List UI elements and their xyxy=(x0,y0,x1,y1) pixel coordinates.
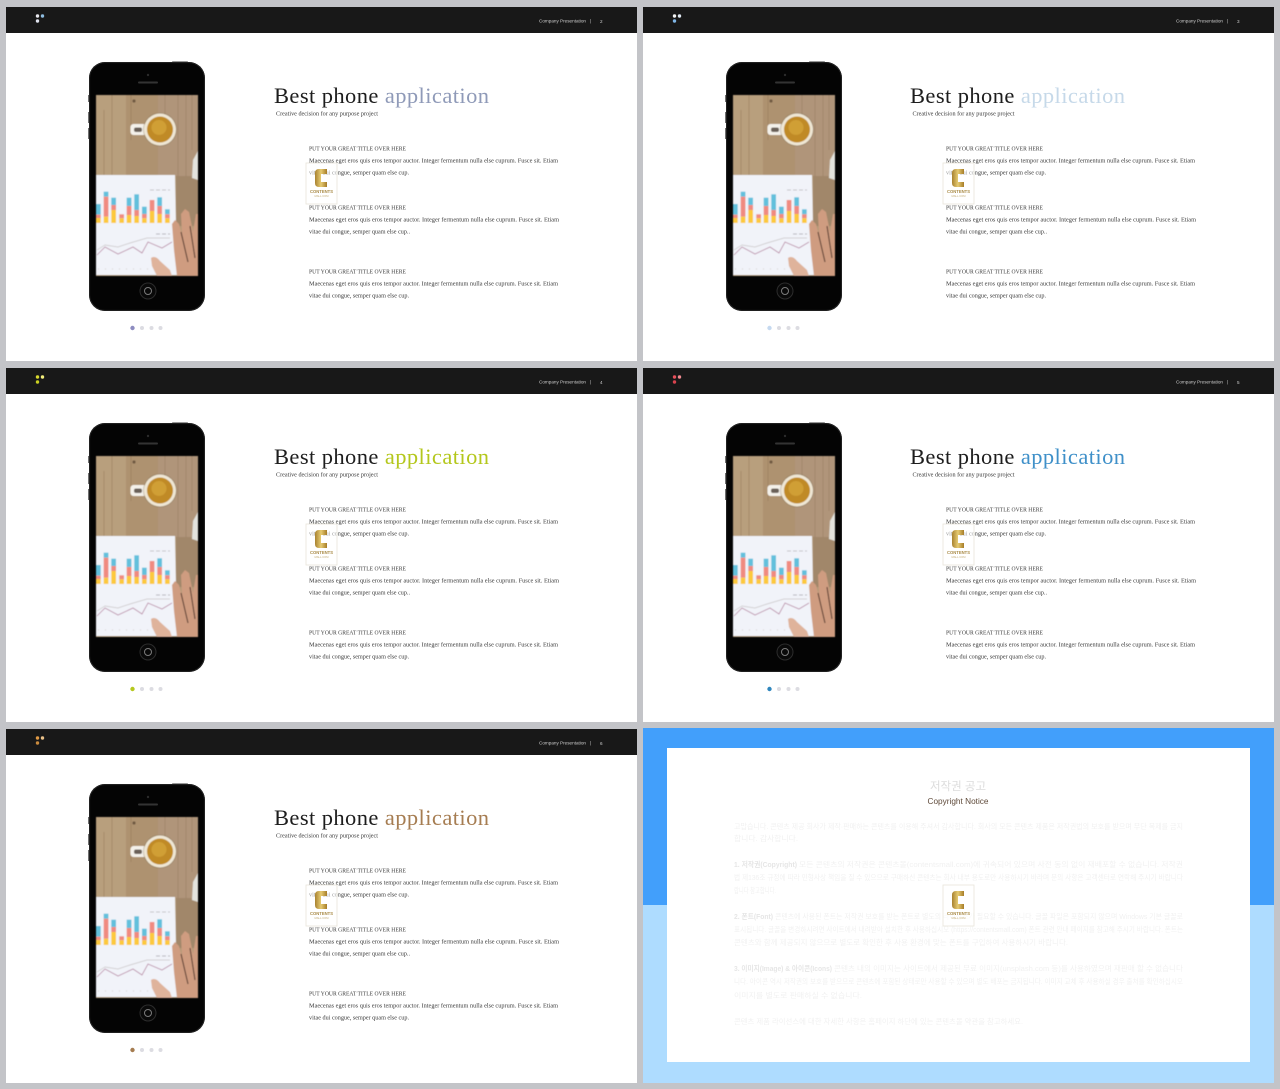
text blocks: Maecenas eget eros quis eros tempor auctor. Integer fermentum nulla else cuprum. Fusce sit. Etiam xyxy=(309,518,558,526)
text blocks: vitae dui congue, semper quam else cup. xyxy=(946,294,1047,300)
header bar xyxy=(6,729,637,755)
notice subheading: Copyright Notice xyxy=(928,797,989,806)
text blocks: PUT YOUR GREAT TITLE OVER HERE xyxy=(309,206,406,212)
header bar: Company Presentation xyxy=(539,380,586,384)
text blocks: PUT YOUR GREAT TITLE OVER HERE xyxy=(309,868,406,874)
notice body text: 랍니다 참고합니다. xyxy=(734,885,776,895)
text blocks: Maecenas eget eros quis eros tempor auctor. Integer fermentum nulla else cuprum. Fusce sit. Etiam xyxy=(946,578,1196,584)
text blocks: vitae dui congue, semper quam else cup. xyxy=(946,170,1047,176)
text blocks: Maecenas eget eros quis eros tempor auctor. Integer fermentum nulla else cuprum. Fusce sit. Etiam xyxy=(309,1002,558,1010)
text blocks: Maecenas eget eros quis eros tempor auctor. Integer fermentum nulla else cuprum. Fusce sit. Etiam xyxy=(309,280,558,288)
notice body text: 콘텐츠 제품 라이선스에 대한 자세한 사항은 홈페이지 하단에 있는 콘텐츠몰 약관을 참고하세요. xyxy=(734,1016,1023,1026)
text blocks: PUT YOUR GREAT TITLE OVER HERE xyxy=(946,630,1043,636)
text blocks: Maecenas eget eros quis eros tempor auctor. Integer fermentum nulla else cuprum. Fusce sit. Etiam xyxy=(946,158,1195,164)
panel: copyright notice xyxy=(643,728,1274,1083)
text blocks: Maecenas eget eros quis eros tempor auctor. Integer fermentum nulla else cuprum. Fusce sit. Etiam xyxy=(309,578,559,584)
header bar xyxy=(6,368,637,394)
header bar: | xyxy=(590,380,591,384)
header bar: Company Presentation xyxy=(539,740,586,746)
title: Best phone application xyxy=(910,83,1125,108)
text blocks: vitae dui congue, semper quam else cup. xyxy=(309,532,410,538)
title: Best phone application xyxy=(274,444,489,469)
phone mockup xyxy=(725,422,842,672)
notice body text: 니다. 아이콘 역시 저작권의 보호를 받으므로 콘텐츠에 포함된 상태로만 사용할 수 있으며 별도 배포는 금지됩니다. 이미지 교체 후 사용하실 경우 출처를 확인하십시오 xyxy=(734,976,1183,986)
text blocks: vitae dui congue, semper quam else cup. xyxy=(309,654,410,660)
text blocks: Maecenas eget eros quis eros tempor auctor. Integer fermentum nulla else cuprum. Fusce sit. Etiam xyxy=(309,642,558,648)
panel: slide 5 phone application xyxy=(643,368,1274,722)
panel: slide 4 phone application xyxy=(6,368,637,722)
pagination dots xyxy=(130,687,162,691)
text blocks xyxy=(946,146,1196,300)
notice body text: 합니다. 감사합니다. xyxy=(734,833,798,843)
panel: slide 3 phone application xyxy=(643,7,1274,361)
text blocks xyxy=(946,508,1196,660)
text blocks: PUT YOUR GREAT TITLE OVER HERE xyxy=(946,206,1043,212)
text blocks: PUT YOUR GREAT TITLE OVER HERE xyxy=(946,508,1043,514)
text blocks: Maecenas eget eros quis eros tempor auctor. Integer fermentum nulla else cuprum. Fusce sit. Etiam xyxy=(309,880,558,886)
pagination dots xyxy=(767,687,800,691)
notice body text: 3. 이미지(Image) & 아이콘(Icons) xyxy=(734,963,832,973)
text blocks: PUT YOUR GREAT TITLE OVER HERE xyxy=(309,566,406,572)
text blocks: vitae dui congue, semper quam else cup.. xyxy=(309,952,410,958)
notice body text: 표시됩니다. 글꼴을 변경하시려면 사이트에서 내려받아 설치한 후 사용하십시오 (https://contentsmall.com) 폰트 관련 안내 페이지를 참고해 주시기 바랍니다. 폰트는 xyxy=(734,924,1183,934)
text blocks: PUT YOUR GREAT TITLE OVER HERE xyxy=(309,270,406,276)
header bar xyxy=(6,7,637,33)
phone mockup xyxy=(88,422,205,672)
text blocks: Maecenas eget eros quis eros tempor auctor. Integer fermentum nulla else cuprum. Fusce sit. Etiam xyxy=(309,938,559,946)
notice body text: 2. 폰트(Font) xyxy=(734,912,773,921)
subtitle: Creative decision for any purpose project xyxy=(276,110,378,118)
text blocks: vitae dui congue, semper quam else cup. xyxy=(309,892,410,898)
text blocks: PUT YOUR GREAT TITLE OVER HERE xyxy=(946,270,1043,276)
pagination dots xyxy=(130,1048,162,1052)
text blocks: vitae dui congue, semper quam else cup.. xyxy=(946,230,1047,236)
notice body text: 1. 저작권(Copyright) xyxy=(734,859,797,869)
text blocks: Maecenas eget eros quis eros tempor auctor. Integer fermentum nulla else cuprum. Fusce sit. Etiam xyxy=(946,280,1195,288)
title: Best phone application xyxy=(274,805,489,830)
text blocks: PUT YOUR GREAT TITLE OVER HERE xyxy=(309,508,406,514)
header bar: | xyxy=(590,18,591,24)
text blocks xyxy=(309,508,559,660)
text blocks: PUT YOUR GREAT TITLE OVER HERE xyxy=(309,928,406,934)
text blocks: Maecenas eget eros quis eros tempor auctor. Integer fermentum nulla else cuprum. Fusce sit. Etiam xyxy=(946,518,1195,526)
subtitle: Creative decision for any purpose project xyxy=(276,472,378,478)
phone mockup xyxy=(725,62,842,311)
text blocks: vitae dui congue, semper quam else cup.. xyxy=(309,590,410,596)
notice body text: 콘텐츠와 함께 제공되지 않으므로 별도로 확인한 후 사용 환경에 맞는 폰트를 구입하여 사용하시기 바랍니다. xyxy=(734,937,1068,947)
text blocks: vitae dui congue, semper quam else cup. xyxy=(946,654,1047,660)
pagination dots xyxy=(767,326,800,330)
header bar: 3 xyxy=(1237,19,1240,24)
notice body text: 이미지를 별도로 판매하실 수 없습니다. xyxy=(734,990,862,1000)
header bar xyxy=(643,7,1274,33)
notice heading: 저작권 공고 xyxy=(930,780,986,793)
notice body text: 콘텐츠에 사용된 폰트는 저작권 보호를 받는 폰트로 별도의 라이선스가 필요할 수 있습니다. 글꼴 파일은 포함되지 않으며 Windows 기본 글꼴로 xyxy=(775,911,1183,921)
phone mockup xyxy=(88,62,205,311)
text blocks: vitae dui congue, semper quam else cup. xyxy=(946,532,1047,538)
text blocks: PUT YOUR GREAT TITLE OVER HERE xyxy=(309,146,406,152)
text blocks: PUT YOUR GREAT TITLE OVER HERE xyxy=(946,146,1043,152)
header bar: Company Presentation xyxy=(539,18,586,24)
text blocks: Maecenas eget eros quis eros tempor auctor. Integer fermentum nulla else cuprum. Fusce sit. Etiam xyxy=(309,216,559,224)
text blocks: vitae dui congue, semper quam else cup.. xyxy=(946,590,1047,596)
header bar: 5 xyxy=(1237,380,1240,385)
text blocks xyxy=(309,868,559,1022)
watermark logo xyxy=(943,885,974,926)
notice body text: 콘텐츠 내의 이미지는 사이트에서 제공된 무료 이미지(unsplash.com 등)를 사용하였으며 재판매 할 수 없습니다 xyxy=(834,963,1183,973)
subtitle: Creative decision for any purpose project xyxy=(276,832,378,840)
panel: slide 2 phone application xyxy=(6,7,637,361)
text blocks: vitae dui congue, semper quam else cup. xyxy=(309,1016,410,1022)
subtitle: Creative decision for any purpose project xyxy=(912,110,1015,118)
text blocks: Maecenas eget eros quis eros tempor auctor. Integer fermentum nulla else cuprum. Fusce sit. Etiam xyxy=(309,158,558,164)
watermark logo xyxy=(943,163,974,204)
title: Best phone application xyxy=(910,444,1125,469)
text blocks: PUT YOUR GREAT TITLE OVER HERE xyxy=(946,566,1043,572)
header bar: | xyxy=(1227,380,1228,384)
header bar: Company Presentation xyxy=(1176,380,1223,384)
text blocks: Maecenas eget eros quis eros tempor auctor. Integer fermentum nulla else cuprum. Fusce sit. Etiam xyxy=(946,216,1196,224)
panel: slide 6 phone application xyxy=(6,729,637,1083)
text blocks: vitae dui congue, semper quam else cup.. xyxy=(309,230,410,236)
watermark logo xyxy=(943,524,974,565)
text blocks: PUT YOUR GREAT TITLE OVER HERE xyxy=(309,992,406,998)
subtitle: Creative decision for any purpose project xyxy=(912,472,1015,478)
notice body text xyxy=(734,821,1183,1026)
header bar xyxy=(643,368,1274,394)
phone mockup xyxy=(88,784,205,1033)
text blocks: Maecenas eget eros quis eros tempor auctor. Integer fermentum nulla else cuprum. Fusce sit. Etiam xyxy=(946,642,1195,648)
watermark logo xyxy=(306,524,337,565)
text blocks xyxy=(309,146,559,300)
header bar: 2 xyxy=(600,19,603,24)
text blocks: vitae dui congue, semper quam else cup. xyxy=(309,170,410,176)
text blocks: vitae dui congue, semper quam else cup. xyxy=(309,294,410,300)
pagination dots xyxy=(130,326,162,330)
notice body text: 고맙습니다. 콘텐츠 제공 회사가 제작·판매하는 콘텐츠를 이용해 주셔서 감사합니다. 회사의 모든 콘텐츠 제품은 저작권법의 보호를 받으며 무단 복제를 금지 xyxy=(734,821,1183,831)
title: Best phone application xyxy=(274,83,489,108)
watermark logo xyxy=(306,163,337,204)
header bar: Company Presentation xyxy=(1176,18,1223,24)
header bar: | xyxy=(590,740,591,746)
notice body text: 모든 콘텐츠의 저작권은 콘텐츠몰(contentsmall.com)에 귀속되어 있으며 사전 동의 없이 재배포할 수 없습니다. 저작권 xyxy=(799,859,1183,869)
notice body text: 법 제136조 규정에 따라 민형사상 책임을 질 수 있으므로 구매하신 콘텐츠는 회사 내부 용도로만 사용하시기 바라며 문의 사항은 고객센터로 연락해 주시기 바랍니다 xyxy=(734,872,1183,882)
header bar: | xyxy=(1227,18,1228,24)
header bar: 4 xyxy=(600,380,603,385)
watermark logo xyxy=(306,885,337,926)
text blocks: PUT YOUR GREAT TITLE OVER HERE xyxy=(309,630,406,636)
header bar: 6 xyxy=(600,741,603,746)
